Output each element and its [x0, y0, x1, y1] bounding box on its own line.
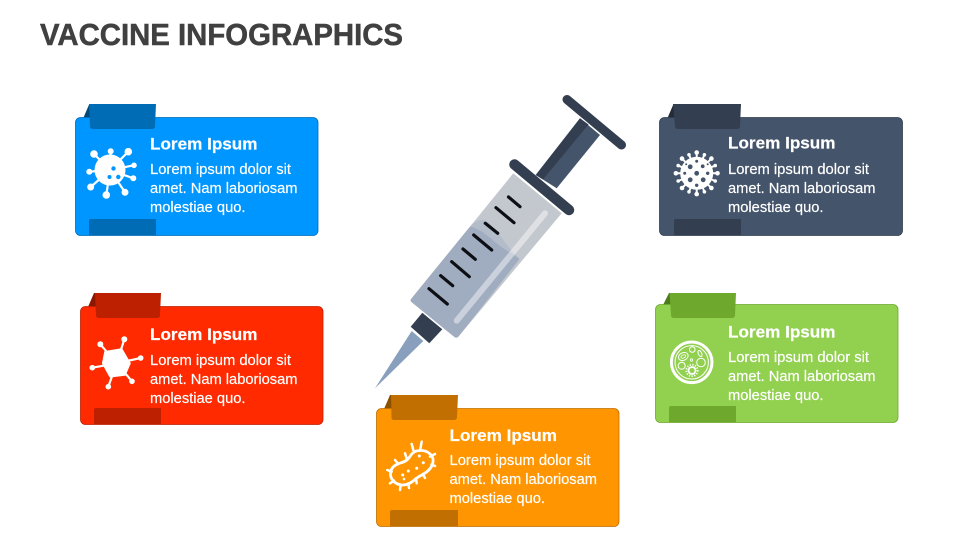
plunger rod	[536, 118, 600, 188]
plunger thumb rest	[567, 100, 622, 145]
text block: red card: Lorem ipsum dolor sit	[150, 353, 291, 369]
icon: virus	[86, 148, 137, 199]
panel: green card	[656, 293, 898, 422]
text block: orange card: Lorem ipsum dolor sit	[450, 453, 590, 469]
heading: red card: Lorem Ipsum	[150, 325, 258, 344]
icon: coronavirus	[674, 150, 720, 196]
highlight on barrel	[457, 213, 545, 321]
barrel flange	[514, 164, 569, 210]
text block: red card: molestiae quo.	[150, 391, 246, 407]
icon: bacterium	[387, 442, 435, 490]
text block: blue card	[150, 162, 298, 216]
heading: green card: Lorem Ipsum	[728, 322, 836, 342]
barrel	[411, 173, 562, 338]
text block: blue card: amet. Nam laboriosam	[150, 181, 298, 197]
panel: red card	[80, 293, 323, 424]
icon: hexagon virus	[90, 336, 144, 390]
text block: blue card: Lorem ipsum dolor sit	[150, 162, 291, 178]
title: VACCINE INFOGRAPHICS	[40, 18, 403, 52]
text block: dark card	[728, 162, 876, 216]
panel: orange card	[376, 395, 619, 526]
text block: dark card: molestiae quo.	[728, 200, 824, 216]
needle	[375, 331, 423, 388]
syringe	[375, 100, 622, 388]
heading: blue card: Lorem Ipsum	[150, 134, 258, 154]
text block: orange card	[450, 453, 597, 507]
text block: red card: amet. Nam laboriosam	[150, 372, 298, 388]
text block: red card	[150, 353, 298, 407]
needle hub	[411, 313, 442, 343]
text block: blue card: molestiae quo.	[150, 200, 246, 216]
panel: dark card	[660, 104, 902, 236]
graduation ticks	[429, 197, 520, 304]
heading: orange card: Lorem Ipsum	[450, 426, 557, 445]
text block: green card: Lorem ipsum dolor sit	[728, 350, 869, 366]
icon: petri dish	[671, 342, 712, 383]
text block: green card	[728, 350, 876, 404]
heading: dark card: Lorem Ipsum	[728, 134, 836, 152]
text block: orange card: amet. Nam laboriosam	[450, 472, 597, 488]
text block: orange card: molestiae quo.	[450, 491, 545, 507]
text block: green card: molestiae quo.	[728, 388, 824, 404]
panel: blue card	[76, 104, 318, 236]
text block: dark card: Lorem ipsum dolor sit	[728, 162, 869, 178]
text block: dark card: amet. Nam laboriosam	[728, 181, 876, 197]
text block: green card: amet. Nam laboriosam	[728, 369, 876, 385]
